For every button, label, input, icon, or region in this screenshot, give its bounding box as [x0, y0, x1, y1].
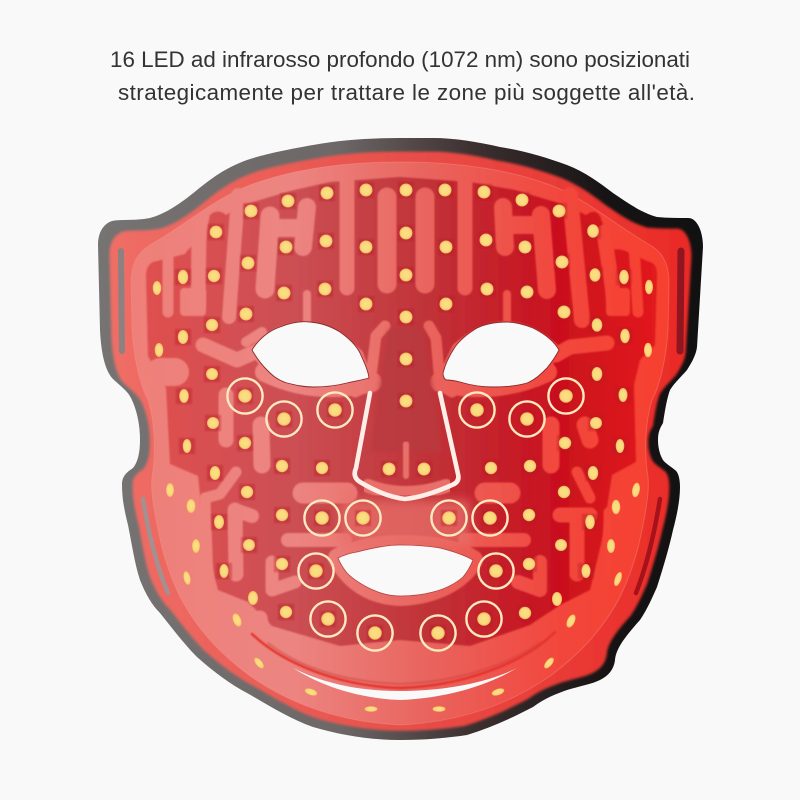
16 highlighted LEDs with rings — [227, 378, 584, 651]
red glowing rim — [109, 152, 691, 731]
stems above eyes — [307, 294, 507, 322]
LED lights — [153, 184, 653, 712]
forehead blocks — [180, 288, 630, 316]
lower face light area — [340, 500, 470, 545]
cheek channels — [160, 372, 608, 630]
central nose column shade — [370, 327, 442, 452]
forehead channels — [168, 175, 638, 320]
LED face mask — [98, 138, 703, 740]
LED shadows — [183, 190, 625, 633]
chin crescent slit — [293, 668, 517, 700]
caption text: strategicamente per trattare le zone più soggette all'età. — [118, 80, 695, 105]
darker circuit region — [146, 177, 657, 646]
inner face panel — [131, 162, 669, 725]
mouth surround — [338, 545, 473, 596]
chin lip line — [252, 632, 555, 688]
eye surrounds — [203, 324, 607, 392]
caption text: 16 LED ad infrarosso profondo (1072 nm) sono posizionati — [110, 47, 690, 72]
eye openings — [252, 322, 559, 387]
caption text — [110, 47, 695, 105]
side slots — [121, 251, 681, 593]
light channels — [160, 175, 638, 630]
nose outline — [355, 393, 458, 499]
nose bottom channel — [368, 444, 446, 493]
mouth opening — [338, 545, 473, 596]
mask outer shell — [98, 138, 703, 740]
